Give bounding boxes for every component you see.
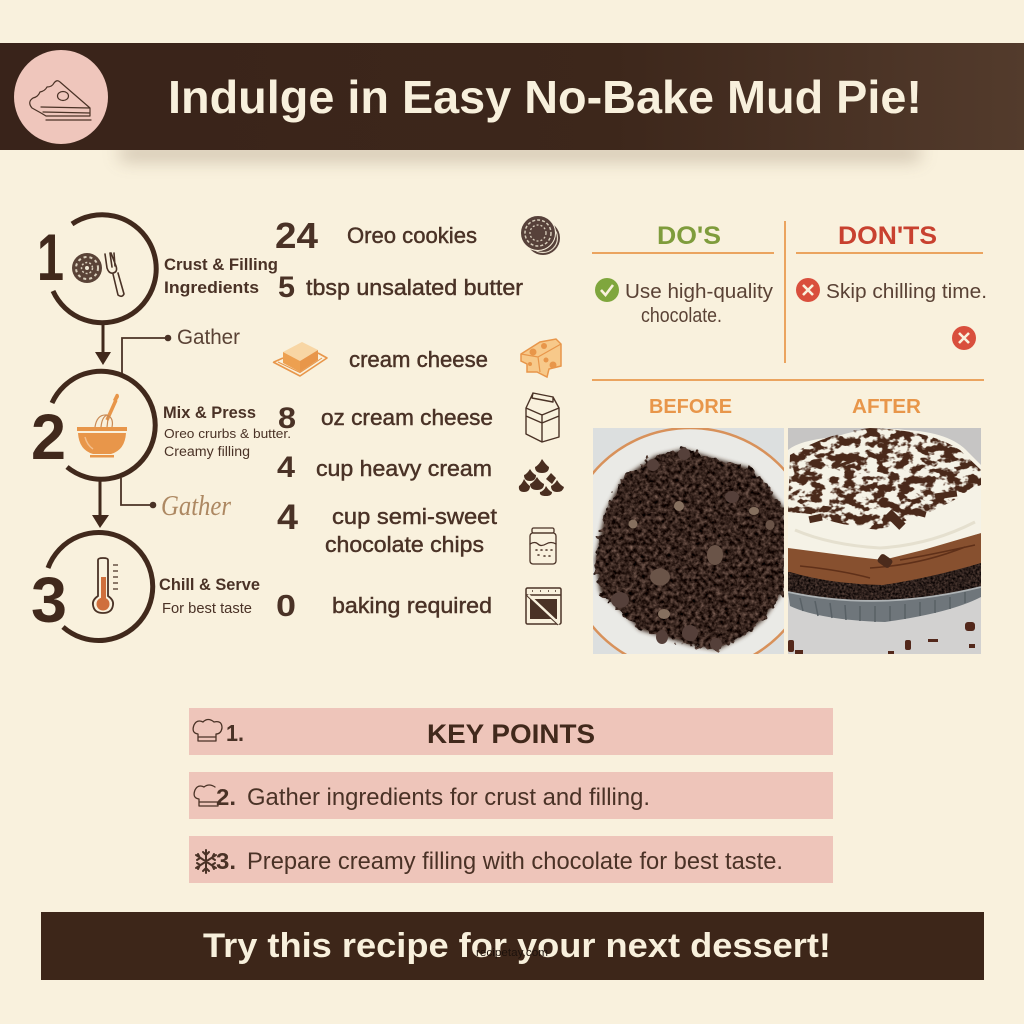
ingredient: chocolate chips: chocolate chips [325,532,484,557]
icon: cookies [520,216,560,255]
ingredient: no baking: 0 [276,588,296,623]
ingredient: heavy cream: 4 [277,451,295,484]
ingredient: cream cheese with butter icon [273,339,561,377]
ingredient: oreo cookies: 24 [275,215,318,256]
icon: chef hat [193,720,222,741]
ingredient: no baking: baking required [332,593,492,618]
heading: after: AFTER [852,395,921,418]
key point row 3: 3. [216,848,236,874]
icon: oven [526,588,561,625]
icon: thermometer [93,558,118,613]
header banner [0,43,1024,160]
do item [595,278,774,327]
icon: oreo and fork [72,253,124,296]
icon: snowflake [196,850,216,873]
step 3: 3 [31,564,67,636]
step 2: Mix & Press [163,403,256,422]
chocolate mousse layer [788,533,981,585]
icon: jar [530,528,556,564]
large crumbs [611,448,774,650]
ingredient: heavy cream [277,451,564,496]
key point row 1 [189,708,833,755]
heading: do's: DO'S [657,222,721,250]
step 2: Creamy filling [164,444,250,459]
step 2: 2 [31,401,66,473]
ingredient: oz cream cheese: oz cream cheese [321,405,493,430]
ingredient: chocolate chips [277,498,556,564]
key point row 2: 2. [216,784,236,810]
photo: before, oreo crumbs on a plate [593,428,784,654]
chocolate shavings [788,428,981,530]
tin [788,587,981,622]
ingredient: oreo cookies: Oreo cookies [347,223,477,248]
key point row 1: 1. [226,720,244,746]
connector: gather: Gather [177,326,240,349]
panel: key points [189,708,833,883]
icon: pie slice [14,50,108,144]
key point row 3 [189,836,833,883]
step 3: For best taste [162,601,252,617]
heading: before: BEFORE [649,395,732,418]
ingredient: oreo cookies [275,215,560,256]
ingredient: oz cream cheese: 8 [278,402,296,435]
heading: don'ts: DON'TS [838,222,937,250]
ingredient: no baking [276,588,561,625]
footer banner [41,912,984,980]
key point row 1: KEY POINTS [427,719,595,749]
arrow: step 1 to 2 [95,323,111,365]
key point row 2: Gather ingredients for crust and filling. [247,784,650,811]
ingredient: heavy cream: cup heavy cream [316,456,492,481]
icon: bowl and whisk [77,394,127,458]
icon: second cross [952,326,976,350]
icon: chocolate chips [519,459,564,496]
panel: do's and don'ts [592,221,987,381]
icon: chef hat [194,785,218,806]
ingredient: oz cream cheese [278,393,559,442]
key point row 2 [189,772,833,819]
photo: after, finished mud pie [788,428,981,654]
connector: script gather: Gather [161,491,231,522]
scattered crumbs [788,622,975,654]
step 2: Oreo crurbs & butter. [164,426,291,441]
connector: script gather [121,478,231,522]
connector: gather [122,326,240,373]
title: Indulge in Easy No-Bake Mud Pie! [168,71,922,123]
icon: check [595,278,619,302]
icon: butter dish [273,342,327,376]
arrow: step 2 to 3 [92,480,109,528]
do item: Use high-quality [625,280,774,303]
icon: cheese [521,339,561,377]
key point row 3: Prepare creamy filling with chocolate for best taste. [247,848,783,875]
step 1: Crust & Filling [164,255,278,274]
step 1 [37,215,278,323]
ingredient: chocolate chips: cup semi-sweet [332,504,497,529]
ingredient: cream cheese with butter icon: cream cheese [349,347,488,372]
panel: steps [31,215,291,641]
panel: ingredients [273,215,564,625]
step 3 [31,533,260,641]
watermark: recipetay.com [476,947,548,959]
footer banner: Try this recipe for your next dessert! [203,927,831,965]
step 2 [31,371,291,479]
don't item: Skip chilling time. [826,280,987,303]
step 3: Chill & Serve [159,575,260,594]
ingredient: chocolate chips: 4 [277,498,299,537]
whipped cream [788,429,981,560]
ingredient: butter: 5 [278,271,295,304]
step 1: Ingredients [164,278,259,297]
icon: cross [796,278,820,302]
do item: chocolate. [641,304,722,327]
icon: milk carton [526,393,559,442]
crust [788,555,981,601]
ingredient: butter [278,271,524,304]
ingredient: butter: tbsp unsalated butter [306,275,524,300]
step 1: 1 [37,220,64,294]
